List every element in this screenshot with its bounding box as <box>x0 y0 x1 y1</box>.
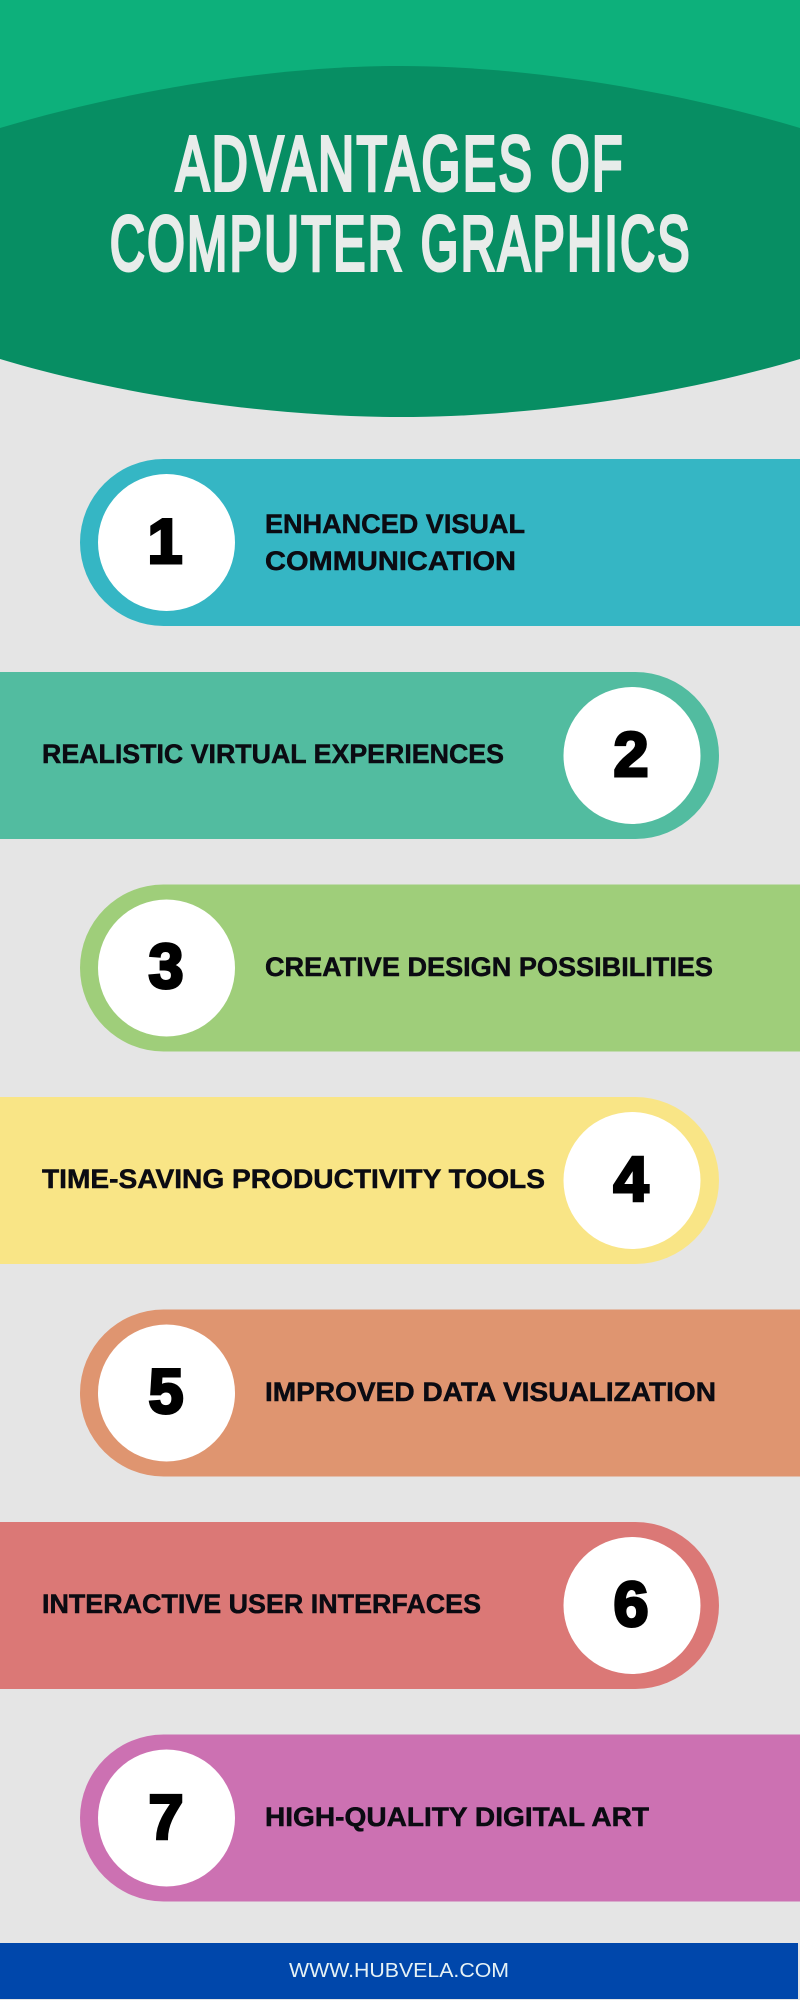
number circle 1 <box>98 474 235 611</box>
number circle 6 <box>564 1537 700 1674</box>
footer url: WWW.HUBVELA.COM <box>289 1960 509 1982</box>
label 6: INTERACTIVE USER INTERFACES <box>42 1589 481 1619</box>
item 4 <box>0 1097 719 1264</box>
number circle 5 <box>98 1324 235 1462</box>
number 7: 7 <box>148 1783 184 1853</box>
item 6 <box>0 1522 719 1689</box>
pill 7 <box>80 1734 800 1902</box>
pill 1 <box>80 459 800 626</box>
label 5: IMPROVED DATA VISUALIZATION <box>265 1377 716 1407</box>
item 5 <box>80 1310 800 1476</box>
footer <box>0 1943 798 1999</box>
item 1 <box>80 459 800 626</box>
label 2: REALISTIC VIRTUAL EXPERIENCES <box>42 739 504 769</box>
pill 3 <box>80 884 800 1052</box>
pill 4 <box>0 1097 719 1264</box>
number 4: 4 <box>613 1145 649 1215</box>
number 2: 2 <box>613 720 649 790</box>
label 1: COMMUNICATION <box>265 546 516 576</box>
number 3: 3 <box>148 932 184 1002</box>
number circle 7 <box>98 1750 235 1886</box>
number circle 3 <box>98 900 235 1036</box>
item 7 <box>80 1734 800 1902</box>
label 4: TIME-SAVING PRODUCTIVITY TOOLS <box>42 1164 545 1194</box>
item 3 <box>80 884 800 1052</box>
number circle 2 <box>564 687 700 824</box>
label 1: ENHANCED VISUAL <box>265 509 525 539</box>
label 3: CREATIVE DESIGN POSSIBILITIES <box>265 952 713 982</box>
header band <box>0 0 800 417</box>
number 6: 6 <box>613 1570 649 1640</box>
label 7: HIGH-QUALITY DIGITAL ART <box>265 1802 650 1832</box>
pill 2 <box>0 672 719 839</box>
title <box>110 121 692 287</box>
number 5: 5 <box>148 1357 184 1427</box>
pill 6 <box>0 1522 719 1689</box>
number circle 4 <box>564 1112 700 1249</box>
number 1: 1 <box>147 507 183 577</box>
item 2 <box>0 672 719 839</box>
pill 5 <box>80 1310 800 1476</box>
